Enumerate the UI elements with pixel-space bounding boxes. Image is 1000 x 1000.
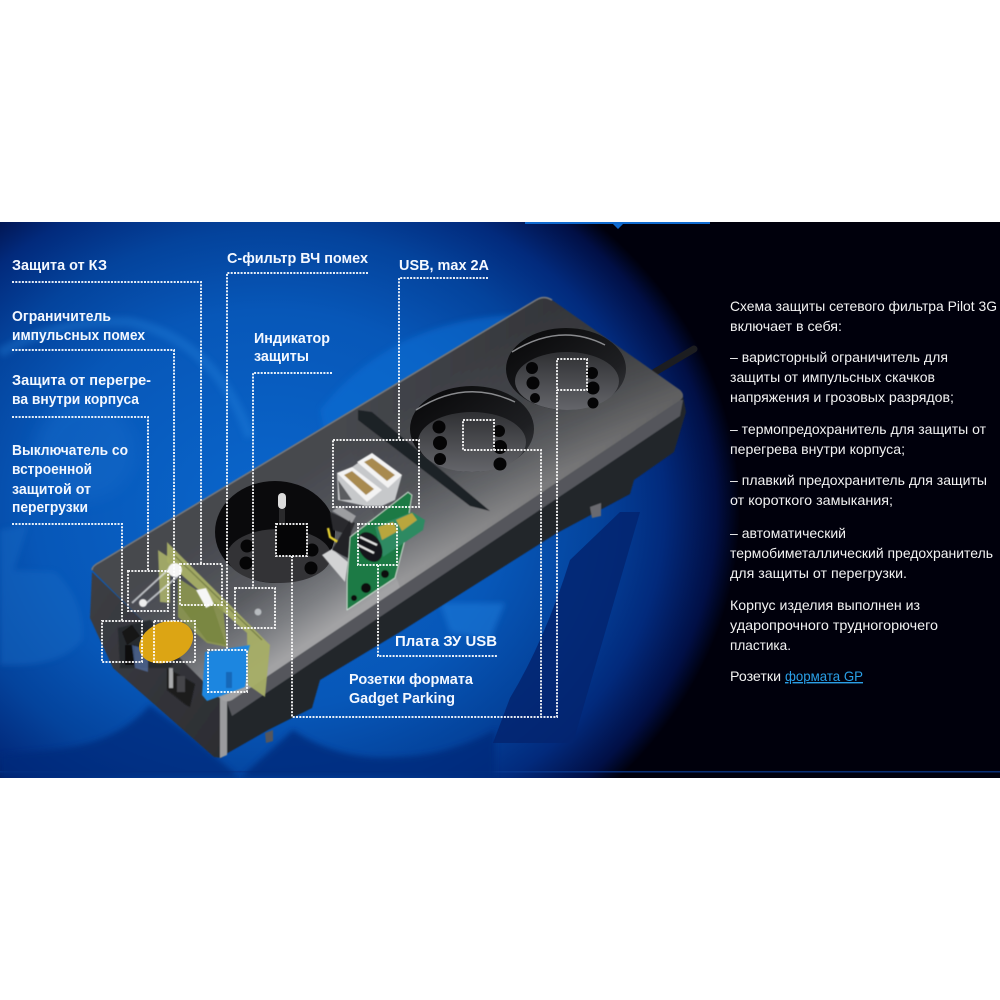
leader: overheat protection	[12, 417, 168, 611]
text block: protection description: напряжения и грозовых разрядов;	[730, 389, 954, 405]
label: switch: встроенной	[12, 461, 92, 478]
device front side	[225, 396, 686, 754]
label: C-filter: С-фильтр ВЧ помех	[227, 250, 369, 267]
icon: left end switch panel	[118, 620, 195, 707]
label: switch: Выключатель со	[12, 442, 128, 459]
label: indicator	[254, 330, 330, 365]
device: surge protector body	[90, 298, 686, 758]
board: left small	[158, 550, 170, 603]
label: USB max: USB, max 2A	[399, 257, 489, 274]
icon: socket 3	[506, 328, 626, 410]
leader: Gadget Parking sockets	[276, 359, 587, 717]
watermark: ghost numerals 3G behind the device	[0, 512, 640, 778]
device foot	[590, 503, 601, 518]
icon: USB connectors	[322, 453, 402, 582]
text block: protection description: Схема защиты сетевого фильтра Pilot 3G	[730, 298, 997, 314]
label: overheat: ва внутри корпуса	[12, 391, 140, 408]
label: indicator: Индикатор	[254, 330, 330, 347]
device recessed divider	[358, 410, 490, 511]
label: overheat: Защита от перегре-	[12, 372, 151, 389]
label: short circuit: Защита от КЗ	[12, 257, 107, 274]
icon: protection circuit boards	[158, 542, 270, 697]
leader: impulse limiter	[12, 350, 195, 662]
board: center	[178, 578, 227, 647]
text block: protection description: – варисторный ограничитель для	[730, 349, 948, 365]
icon: glass fuse	[132, 563, 262, 616]
text block: protection description: ударопрочного трудногорючего	[730, 617, 938, 633]
device foot rear	[265, 730, 273, 743]
icon: schuko socket 1	[215, 481, 335, 583]
text block: protection description: защиты от импульсных скачков	[730, 369, 935, 385]
label: impulse limiter: Ограничитель	[12, 308, 111, 325]
text block: protection description	[730, 298, 997, 684]
label: switch: перегрузки	[12, 499, 88, 516]
text block: protection description: – автоматический	[730, 525, 846, 541]
dotted leader lines and component boxes	[12, 273, 587, 717]
board: main	[167, 542, 270, 697]
icon: yellow varistor disc	[133, 613, 199, 671]
label: overheat	[12, 372, 151, 408]
label: Gadget Parking: Розетки формата	[349, 671, 474, 688]
text block: protection description: от короткого замыкания;	[730, 492, 893, 508]
leader: USB charger board	[358, 524, 498, 656]
icon: socket 2	[410, 386, 534, 472]
text block: protection description: формата GP	[785, 668, 863, 684]
leader: USB	[333, 278, 488, 507]
label: Gadget Parking: Gadget Parking	[349, 690, 455, 707]
label: indicator: защиты	[254, 348, 309, 365]
leader: C-filter	[208, 273, 368, 692]
label: USB charger board: Плата ЗУ USB	[395, 633, 497, 650]
text block: protection description: перегрева внутри корпуса;	[730, 441, 905, 457]
leader: indicator	[235, 373, 332, 628]
text block: protection description: пластика.	[730, 637, 791, 653]
device top face	[92, 298, 683, 701]
device left end face	[90, 572, 222, 758]
text block: protection description: для защиты от перегрузки.	[730, 565, 907, 581]
text block: protection description: термобиметаллический предохранитель	[730, 545, 993, 561]
top edge accent	[525, 222, 710, 229]
text block: protection description: – плавкий предохранитель для защиты	[730, 472, 987, 488]
text block: protection description: – термопредохранитель для защиты от	[730, 421, 987, 437]
text block: protection description: включает в себя:	[730, 318, 842, 334]
label: Gadget Parking	[349, 671, 474, 707]
panel: blue background band	[0, 222, 1000, 778]
text block: protection description: Корпус изделия выполнен из	[730, 597, 920, 613]
icon: power cord	[655, 349, 694, 372]
icon: blue capacitor	[202, 645, 250, 701]
label: impulse limiter: импульсных помех	[12, 327, 146, 344]
label: switch: защитой от	[12, 481, 91, 498]
label: impulse limiter	[12, 308, 146, 344]
text block: protection description: Розетки	[730, 668, 781, 684]
callout labels	[12, 250, 497, 707]
icon: USB charger board	[347, 492, 425, 610]
leader: switch	[12, 524, 142, 662]
label: switch	[12, 442, 128, 516]
leader: short-circuit protection	[12, 282, 222, 605]
